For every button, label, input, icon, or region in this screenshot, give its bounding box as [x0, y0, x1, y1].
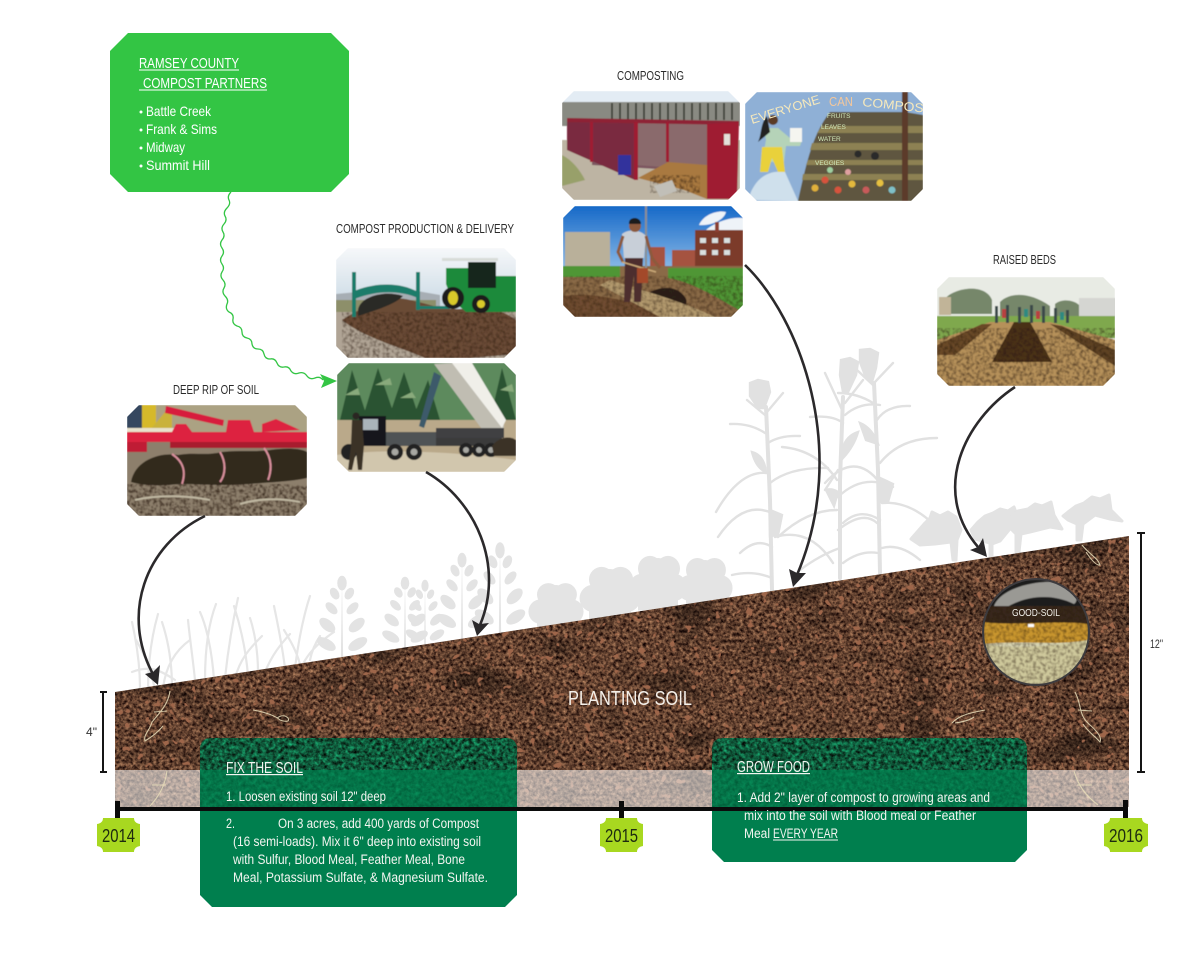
- heading: partners: RAMSEY COUNTY: [139, 56, 239, 72]
- photo: Everyone Can Compost mural: WATER: [818, 136, 841, 143]
- photo: Everyone Can Compost mural: LEAVES: [821, 124, 846, 131]
- photo: Everyone Can Compost mural: [745, 92, 933, 201]
- partner list: Battle Creek: [146, 103, 212, 119]
- corn 3: [825, 349, 942, 573]
- arrow: composting to soil: [745, 265, 820, 587]
- arrow: raised beds to soil: [955, 387, 1015, 557]
- photo: raised beds: [937, 277, 1117, 386]
- text: grow food: [737, 759, 990, 841]
- step 2: with Sulfur, Blood Meal, Feather Meal, Bone: [232, 852, 465, 867]
- step 2: [226, 816, 488, 885]
- label: raised beds: RAISED BEDS: [993, 253, 1056, 267]
- arrow: deep rip to soil: [139, 516, 205, 685]
- label: compost production and delivery: COMPOST PRODUCTION & DELIVERY: [336, 222, 515, 236]
- heading: partners: COMPOST PARTNERS: [143, 76, 267, 92]
- plants: cabbages: [528, 556, 733, 632]
- label: deep rip of soil: DEEP RIP OF SOIL: [173, 383, 259, 397]
- plants: corn: [716, 349, 942, 590]
- pale lower band: [115, 770, 1129, 807]
- partner list: Summit Hill: [146, 157, 210, 173]
- plants: grass: [132, 596, 334, 690]
- label: planting soil: PLANTING SOIL: [568, 688, 692, 710]
- plants: leafy heads: [911, 495, 1122, 560]
- photo: Everyone Can Compost mural: EVERYONE: [749, 92, 822, 127]
- step 2: On 3 acres, add 400 yards of Compost: [278, 816, 479, 831]
- depth marker: 4 inch: 4": [86, 725, 97, 739]
- year badge 2016: 2016: [1109, 826, 1143, 846]
- arrow: partners to delivery: [220, 192, 337, 388]
- photo: compost bin: [562, 91, 740, 200]
- corn 1: [716, 380, 833, 590]
- step 2: (16 semi-loads). Mix it 6" deep into existing soil: [233, 834, 481, 849]
- text: fix the soil: [226, 760, 488, 885]
- step 1: mix into the soil with Blood meal or Feather: [744, 808, 976, 823]
- partner list: [140, 103, 217, 173]
- good soil inset: [982, 578, 1090, 686]
- photo: Everyone Can Compost mural: FRUITS: [827, 113, 851, 120]
- depth marker: 4 inch: [86, 692, 107, 772]
- depth marker: 12 inch: 12": [1150, 637, 1163, 651]
- roots: [145, 545, 1101, 806]
- depth marker: 12 inch: [1137, 533, 1163, 772]
- partner list: Midway: [146, 139, 185, 155]
- heading: partners: [139, 56, 267, 92]
- corn 2: [778, 358, 893, 578]
- step 2: Meal, Potassium Sulfate, & Magnesium Sulfate.: [233, 870, 488, 885]
- grey plant silhouettes: [132, 349, 1122, 690]
- panel: grow food background: [712, 738, 1027, 862]
- year badge 2014: [97, 818, 140, 852]
- photo: compost production: [336, 248, 516, 358]
- partner list: Frank & Sims: [146, 121, 217, 137]
- photo: deep rip of soil: [127, 405, 307, 516]
- year badge 2015: [600, 818, 643, 852]
- photo: Everyone Can Compost mural: COMPOST: [862, 95, 933, 116]
- label: good soil: GOOD-SOIL: [1012, 607, 1060, 619]
- arrow: delivery to soil: [426, 472, 489, 636]
- year badge 2014: 2014: [102, 826, 135, 846]
- photo: delivery truck: [337, 363, 516, 472]
- year badge 2016: [1104, 818, 1148, 852]
- step 1: 1. Loosen existing soil 12" deep: [226, 789, 386, 804]
- label: composting: COMPOSTING: [617, 69, 684, 83]
- heading: grow food: GROW FOOD: [737, 759, 810, 776]
- soil wedge: planting soil: [115, 536, 1129, 807]
- step 1: [737, 790, 990, 841]
- heading: fix the soil: FIX THE SOIL: [226, 760, 303, 777]
- panel: Ramsey County compost partners: [110, 33, 349, 192]
- step 1: 1. Add 2" layer of compost to growing areas and: [737, 790, 990, 805]
- step 1: EVERY YEAR: [773, 826, 838, 841]
- plants: leafy herbs: [315, 542, 527, 665]
- photo: Everyone Can Compost mural: VEGGIES: [815, 160, 845, 167]
- year badge 2015: 2015: [605, 826, 638, 846]
- timeline axis: [115, 800, 1128, 818]
- panel: fix the soil background: [200, 738, 517, 907]
- photo: Everyone Can Compost mural: CAN: [829, 95, 853, 109]
- step 1: Meal: [744, 826, 770, 841]
- step 2: 2.: [226, 816, 235, 831]
- photo: gardener spreading compost: [563, 206, 743, 317]
